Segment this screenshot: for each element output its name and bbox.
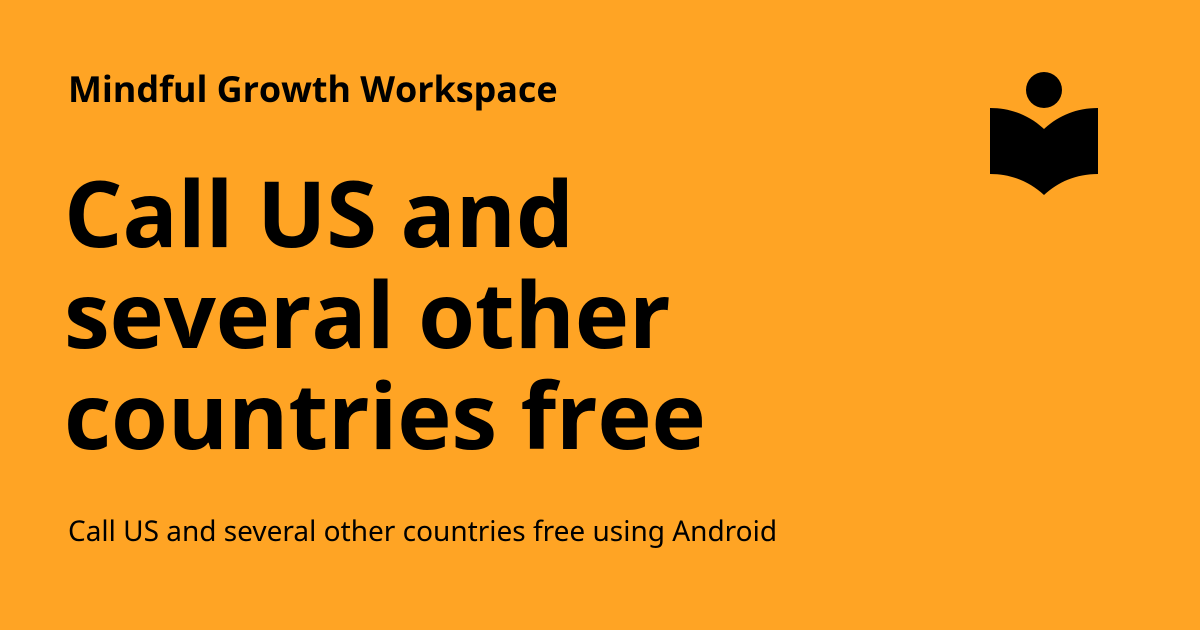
main title: Call US and	[64, 149, 574, 274]
icon: reader with open book	[990, 72, 1098, 195]
main title	[64, 149, 706, 476]
subtitle: Call US and several other countries free using Android	[68, 512, 777, 550]
brand heading: Mindful Growth Workspace	[68, 64, 558, 113]
main title: several other	[64, 250, 670, 375]
main title: countries free	[64, 351, 706, 476]
